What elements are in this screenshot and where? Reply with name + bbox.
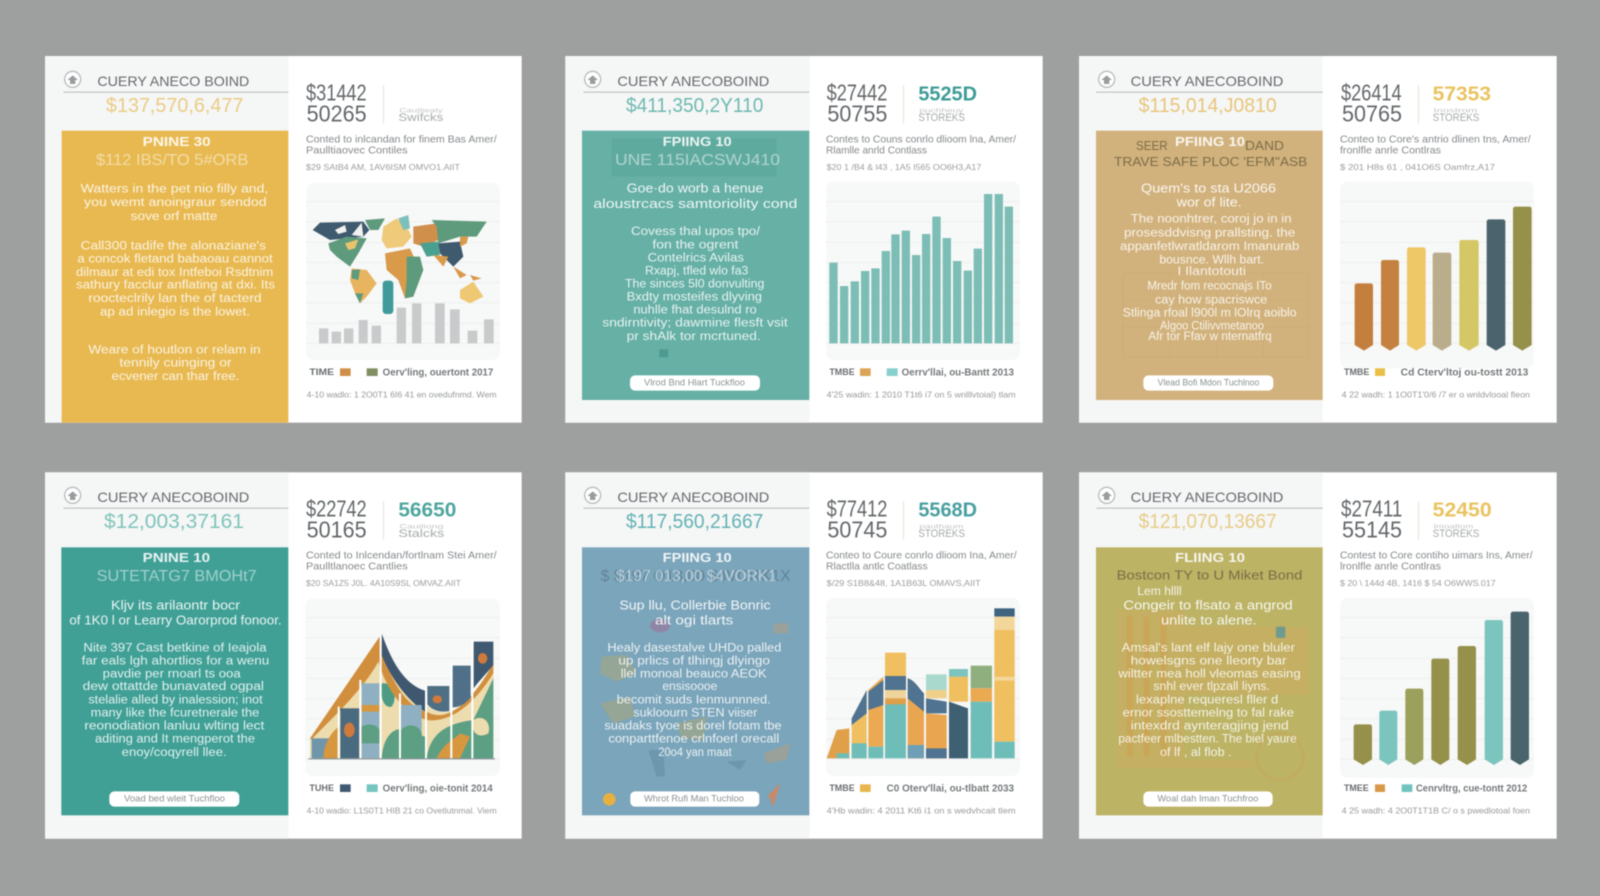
legend: [309, 783, 493, 794]
description: $ 20 \ 144d 4B, 1416 $ 54 O6WWS.017: [1340, 578, 1496, 588]
panel: blue text: 20o4 yan maat: [658, 745, 732, 759]
headline figure: $115,014,J0810: [1139, 95, 1277, 117]
stat: totals: [827, 496, 887, 542]
button: [630, 375, 760, 391]
stat: gold value: 57353: [1433, 84, 1491, 106]
panel: tan text: [1096, 131, 1323, 400]
card 2: teal bar chart: [565, 56, 1043, 423]
button: Vlrod Bnd Hlart Tuckfloo: [644, 377, 745, 387]
icon: badge: [1099, 71, 1115, 87]
panel: olive text: Amsal's lant elf lajy one bluler: [1122, 641, 1295, 655]
panel: dark teal text: [61, 547, 288, 815]
panel: olive text: intexdrd aynteragjing jend: [1131, 718, 1289, 732]
panel: dark teal text: far eals lgh ahortlios for a wenu: [82, 654, 269, 668]
panel: olive text: snhl ever tlpzall liyns.: [1153, 679, 1270, 693]
heading: CUERY ANECOBOIND: [617, 489, 769, 505]
panel: yellow text: ap ad inlegio is the lowet.: [100, 304, 250, 318]
heading: CUERY ANECOBOIND: [1131, 73, 1283, 89]
stat: totals: 55145: [1342, 516, 1402, 542]
panel: olive text: unlite to alene.: [1161, 613, 1257, 628]
stat: gold value: Imoatlom: [1433, 524, 1474, 531]
panel: yellow text: roocteclrily lan the of tacterd: [88, 291, 262, 305]
panel: blue text: [582, 547, 809, 815]
stat: teal value: 5525D: [918, 84, 977, 106]
stat: teal value: [398, 500, 456, 540]
legend: Cd Cterv'ltoj ou-tostt 2013: [1401, 367, 1529, 378]
panel: tan text: PFIING 10: [1175, 134, 1245, 149]
panel: olive text: Congeir to flsato a angrod: [1123, 597, 1293, 612]
panel: yellow text: tennily cuinging or: [119, 356, 232, 370]
card 1: yellow world map: [45, 56, 522, 423]
legend: [1344, 367, 1529, 378]
description: $/29 S1B8&48, 1A1B63L OMAVS,AIIT: [827, 578, 981, 588]
panel: tan text: SEER: [1136, 138, 1168, 153]
panel: blue text: Healy dasestalve UHDo palled: [607, 641, 781, 655]
stat: switches: Swifcks: [398, 112, 443, 124]
stat: gold value: 52450: [1433, 500, 1492, 522]
stat: totals: $77412: [827, 496, 887, 522]
description: $29 SAtB4 AM, 1AV6ISM OMVO1.AIIT: [306, 162, 461, 172]
panel: dark teal text: enoy/coqyrell llee.: [122, 745, 227, 759]
panel: yellow text: ecvener can thar free.: [112, 369, 239, 383]
stat: totals: [306, 80, 367, 126]
panel: tan text: bousnce. Wllh bart.: [1159, 252, 1264, 266]
panel: tan text: Stlinga rfoal l900l m lOlrq aoiblo: [1123, 306, 1297, 320]
headline figure: $117,560,21667: [626, 511, 763, 533]
description: Conteo to Core's antrio dlinen tns, Amer/: [1340, 135, 1531, 146]
footer note: 4-10 wadlo: 1 2O0T1 6I6 41 en ovedufnmd. Wem: [307, 389, 497, 399]
panel: tan text: Quem's to sta U2066: [1141, 181, 1276, 196]
heading: CUERY ANECOBOIND: [97, 489, 249, 505]
stat: teal value: 56650: [398, 500, 456, 522]
stat: gold value: [1433, 84, 1491, 124]
stat: gold value: STOREKS: [1433, 112, 1479, 124]
stat: teal value: Cauiliong: [399, 524, 444, 531]
icon: badge: [585, 487, 601, 503]
panel: dark teal text: many like the fcuretnerale the: [91, 706, 259, 720]
stat: teal value: STOREKS: [918, 112, 965, 124]
panel: tan text: Afr tor Ffav w nternatfrq: [1148, 329, 1272, 343]
heading: CUERY ANECOBOIND: [1131, 489, 1283, 505]
description: $20 SA1Z5 J0L. 4A10S9SL OMVAZ.AIIT: [306, 578, 462, 588]
headline figure: $121,070,13667: [1139, 511, 1277, 533]
legend: Oerv'ling, ouertont 2017: [383, 367, 493, 378]
panel: olive text: howelsgns one lleorty bar: [1131, 654, 1287, 668]
panel: olive text: Bostcon TY to U Miket Bond: [1117, 567, 1302, 582]
chart: stacked bars: [826, 598, 1020, 776]
panel: tan text: wor of lite.: [1176, 195, 1242, 210]
panel: dark teal text: aditing and It mengperot the: [95, 732, 255, 746]
stat: totals: 50165: [307, 516, 367, 542]
panel: teal text: Covess thal upos tpo/: [631, 224, 761, 238]
chart: world map and bars: [306, 183, 500, 360]
panel: tan text: I Ilantotouti: [1177, 264, 1246, 278]
panel: teal text: nuhlle fhat desulnd ro: [633, 302, 757, 316]
panel: yellow text: $112 IBS/TO 5#ORB: [96, 152, 248, 169]
legend: TIME: [309, 367, 334, 377]
description: lronlfle anrle Contlras: [1340, 561, 1441, 572]
legend: Cenrvltrg, cue-tontt 2012: [1416, 783, 1527, 794]
stat: totals: $22742: [306, 496, 367, 522]
panel: blue text: up prlics of tlhingj dlyingo: [618, 654, 770, 668]
description: Rlamlle anrld Contlass: [826, 145, 927, 156]
stat: teal value: pauthaum: [919, 524, 964, 531]
legend: TMEE: [1344, 783, 1369, 793]
stat: totals: [1341, 80, 1402, 126]
legend: [1344, 783, 1527, 794]
footer note: 4-10 wadio: L1S0T1 HIB 21 co Ovetlutnmal. Viem: [307, 805, 497, 815]
panel: tan text: The noonhtrer, coroj jo in in: [1131, 212, 1292, 226]
panel: olive text: Lem hllll: [1137, 584, 1182, 598]
description: Conted to inlcandan for finem Bas Amer/: [306, 135, 497, 146]
card 5: blue stacked bars: [565, 472, 1043, 839]
button: Voad bed wleit Tuchfloo: [124, 793, 225, 803]
description: [306, 135, 497, 172]
panel: blue text: sukloourn STEN viiser: [633, 706, 757, 720]
panel: blue text: llel monoal beauco AEOK: [621, 666, 767, 680]
panel: dark teal text: stelalie alled by inalession; inot: [88, 692, 263, 706]
stat: totals: [827, 80, 887, 126]
button: Vlead Bofi Mdon Tuchlnoo: [1158, 377, 1259, 387]
stat: gold value: Inostrom: [1433, 108, 1478, 115]
panel: dark teal text: reonodiation lanluu wlting lect: [84, 718, 265, 732]
description: fronlfle anrle Contlras: [1340, 145, 1441, 156]
panel: teal text: fon the ogrent: [652, 237, 739, 251]
stat: totals: 50265: [307, 100, 367, 126]
stat: totals: 50755: [827, 100, 887, 126]
legend: TUHE: [309, 783, 334, 793]
panel: tan text: Mredr fom recocnajs ITo: [1147, 278, 1272, 292]
card 6: olive pencil bars: [1079, 472, 1557, 839]
chart: teal bars: [826, 182, 1020, 360]
footer note: 4'Hb wadin: 4 2011 Kt6 i1 on s wedvhcait tlem: [827, 805, 1016, 815]
description: Conteo to Coure conrlo dlioom Ina, Amer/: [826, 551, 1017, 562]
legend: TMBE: [1344, 367, 1369, 377]
button: [630, 791, 759, 807]
panel: blue text: alt ogi tlarts: [655, 613, 734, 628]
footer note: 4 22 wadh: 1 1O0T1'0/6 /7 er o wnldvlooal fleon: [1342, 389, 1530, 399]
panel: blue text: ensisoooe: [662, 679, 717, 693]
panel: yellow text: [62, 131, 288, 423]
stat: totals: 50745: [827, 516, 887, 542]
stat: teal value: [918, 84, 977, 124]
card 3: tan pencil bars: [1079, 56, 1557, 423]
button: Whrot Rufi Man Tuchloo: [644, 793, 744, 803]
panel: tan text: appanfetlwratldarom Imanurab: [1120, 239, 1299, 253]
description: Contest to Core contiho uimars Ins, Amer/: [1340, 551, 1533, 562]
panel: olive text: of lf , al flob .: [1160, 745, 1232, 759]
description: [826, 135, 1016, 172]
panel: blue text: suadaks tyoe is dorel fotam tbe: [604, 718, 782, 732]
panel: yellow text: Watters in the pet nio filly and,: [81, 182, 268, 196]
panel: yellow text: Weare of houtlon or relam in: [88, 342, 261, 356]
panel: teal text: FPIING 10: [663, 134, 732, 149]
legend: TMBE: [829, 783, 855, 793]
icon: badge: [585, 71, 601, 87]
panel: blue text: FPIING 10: [663, 550, 732, 565]
panel: blue text: $197 013,00 $4VORK1: [616, 568, 777, 585]
panel: teal text: sndirntivity; dawmine flesft vsit: [602, 316, 788, 330]
panel: teal text: pr shAlk tor mcrtuned.: [627, 329, 761, 343]
button: [1143, 375, 1273, 391]
stat: totals: $27411: [1341, 496, 1402, 522]
icon: badge: [1099, 487, 1115, 503]
panel: blue text: becomit suds Ienmunnned.: [617, 692, 771, 706]
stat: totals: [306, 496, 367, 542]
legend: Oerrv'llai, ou-Bantt 2013: [902, 367, 1015, 378]
headline figure: $137,570,6,477: [106, 95, 243, 117]
stat: totals: $31442: [306, 80, 367, 106]
panel: yellow text: Call300 tadife the alonaziane's: [81, 238, 266, 252]
headline figure: $12,003,37161: [104, 511, 244, 533]
stat: totals: 50765: [1342, 100, 1402, 126]
stat: teal value: 5568D: [918, 500, 977, 522]
legend: [829, 783, 1015, 794]
heading: CUERY ANECOBOIND: [617, 73, 769, 89]
panel: teal text: [582, 131, 809, 400]
panel: tan text: DAND: [1245, 138, 1284, 153]
card 4: dark teal area chart: [45, 472, 522, 839]
panel: tan text: cay how spacriswce: [1155, 292, 1267, 306]
description: Conted to Inlcendan/fortlnam Stei Amer/: [306, 551, 497, 562]
description: [1340, 135, 1531, 172]
panel: dark teal text: Nite 397 Cast betkine of Ieajola: [83, 641, 267, 655]
button: [1143, 791, 1273, 807]
chart: layered area with bars: [305, 599, 500, 776]
panel: dark teal text: PNINE 10: [143, 550, 210, 565]
panel: teal text: Contelrics Avilas: [648, 251, 744, 265]
panel: yellow text: sove orf matte: [131, 209, 217, 223]
description: $20 1 /B4 & l43 , 1A5 I565 OO6H3,A17: [827, 162, 982, 172]
panel: yellow text: dilmaur at edi tox Intfeboi Rsdtnim: [76, 265, 273, 279]
legend: C0 Oterv'llai, ou-tlbatt 2033: [887, 783, 1015, 794]
panel: tan text: Algoo Ctilivvmetanoo: [1160, 318, 1264, 332]
panel: tan text: prosesddvisng prallsting. the: [1124, 226, 1295, 240]
chart: pencil bars: [1340, 182, 1534, 368]
stat: teal value: puchheuy: [919, 108, 964, 115]
icon: badge: [65, 487, 81, 503]
button: Woal dah Iman Tuchfroo: [1157, 793, 1258, 803]
panel: olive text: FLIING 10: [1175, 550, 1245, 565]
description: $ 201 H8s 61 , 041O6S Oamfrz,A17: [1340, 162, 1495, 172]
description: Contes to Couns conrlo dlioom lna, Amer/: [826, 135, 1016, 146]
panel: teal text: Goe·do worb a henue: [627, 181, 763, 196]
stat: totals: [1341, 496, 1402, 542]
panel: yellow text: a concok fletand babaoau cannot: [77, 252, 273, 266]
panel: dark teal text: SUTETATG7 BMOHt7: [97, 568, 257, 585]
panel: blue text: $ $197 O13,00 $4VORK1X: [601, 568, 791, 585]
panel: yellow text: sathury facclur anflating at dxi. Its: [76, 278, 275, 292]
panel: olive text: pactfeer mlbestten. The biel yaure: [1118, 732, 1297, 746]
panel: tan text: TRAVE SAFE PLOC 'EFM"ASB: [1114, 154, 1307, 169]
panel: teal text: Rxapj, tfled wlo fa3: [645, 263, 748, 277]
stat: switches: [398, 108, 444, 124]
stat: teal value: STOREKS: [918, 528, 965, 540]
legend: [829, 367, 1015, 378]
panel: dark teal text: pavdie per rnoarl ts ooa: [103, 666, 241, 680]
panel: teal text: The sinces 5l0 donvulting: [625, 277, 764, 291]
description: [306, 551, 497, 588]
footer note: 4'25 wadin: 1 2010 T1t6 i7 on 5 wnlllvtoial) tlam: [827, 389, 1016, 399]
panel: olive text: [1096, 547, 1323, 815]
description: Paulltiaovec Contiles: [306, 145, 408, 156]
panel: teal text: aloustrcacs samtoriolity cond: [593, 196, 797, 211]
description: [1340, 551, 1533, 588]
panel: blue text: conparttfenoe crlnfoerl orecall: [608, 732, 779, 746]
panel: teal text: UNE 115IACSWJ410: [615, 152, 780, 169]
icon: badge: [65, 71, 81, 87]
heading: CUERY ANECO BOIND: [97, 73, 249, 89]
footer note: 4 25 wadh: 4 2O0T1T1B C/ o s pwedlotoal foen: [1342, 805, 1530, 815]
chart: pencil bars: [1340, 598, 1534, 778]
description: [826, 551, 1017, 588]
stat: totals: $26414: [1341, 80, 1402, 106]
description: Paulltlanoec Cantlies: [306, 561, 408, 572]
panel: blue text: Sup llu, Collerbie Bonric: [619, 597, 771, 612]
legend: Oerv'ling, oie-tonit 2014: [383, 783, 493, 794]
stat: switches: Cautlieaty: [399, 108, 444, 115]
panel: yellow text: you wemt anoingraur sendod: [84, 195, 267, 209]
headline figure: $411,350,2Y110: [626, 95, 763, 117]
stat: gold value: STOREKS: [1433, 528, 1479, 540]
stat: totals: $27442: [827, 80, 887, 106]
panel: yellow text: PNINE 30: [143, 134, 211, 149]
panel: dark teal text: dew ottattde bunavated ogpal: [83, 679, 264, 693]
panel: dark teal text: Kljv its arilaontr bocr: [111, 597, 241, 612]
panel: olive text: wiltter mea holl vleomas easing: [1117, 666, 1301, 680]
description: Rlactlla antlc Coatlass: [826, 561, 928, 572]
button: [109, 791, 239, 807]
stat: teal value: Stalcks: [398, 528, 444, 540]
panel: teal text: Bxdty mosteifes dlyving: [627, 290, 762, 304]
legend: [309, 367, 493, 378]
stat: gold value: [1433, 500, 1492, 540]
legend: TMBE: [829, 367, 855, 377]
panel: dark teal text: of 1K0 l or Learry Oarorprod fonoor.: [69, 613, 282, 628]
stat: teal value: [918, 500, 977, 540]
panel: olive text: ernor ssosttemelng to fal rake: [1123, 706, 1294, 720]
panel: olive text: lexaplne requeresl fller d: [1136, 692, 1278, 706]
